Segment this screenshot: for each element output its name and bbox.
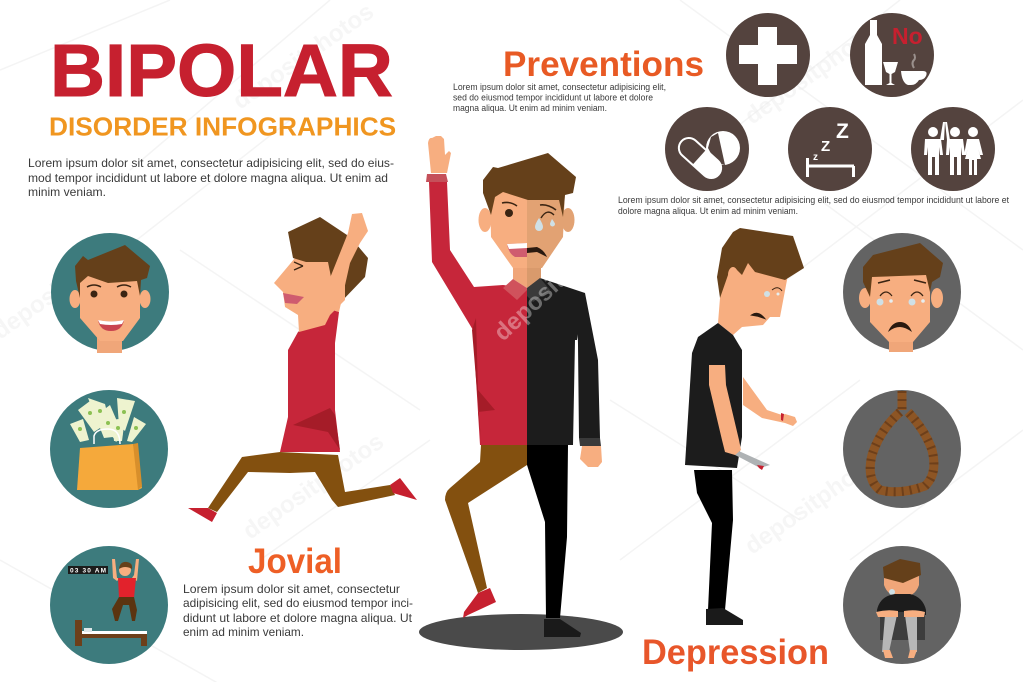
icon: sleep xyxy=(788,107,872,191)
jovial text block xyxy=(183,582,413,639)
left eye xyxy=(505,209,513,217)
panel: jovial icons xyxy=(50,233,169,664)
prevention note text block: Lorem ipsum dolor sit amet, consectetur adipisicing elit, sed do eiusmod tempor incididunt ut labore et xyxy=(618,195,1009,205)
icon: sleep: z xyxy=(813,152,818,163)
far arm xyxy=(743,377,797,426)
fist xyxy=(580,446,602,467)
intro text block: Lorem ipsum dolor sit amet, consectetur adipisicing elit, sed do eius- xyxy=(28,156,394,170)
panel: prevention icons xyxy=(665,13,995,191)
icon: medical cross xyxy=(726,13,810,97)
preventions text block: sed do eiusmod tempor incididunt ut labore et dolore xyxy=(453,92,653,102)
back hair xyxy=(340,240,368,303)
shoes xyxy=(188,478,417,522)
watermark: depositphotos xyxy=(740,443,891,560)
raised arm xyxy=(323,213,368,312)
panel: depression icons xyxy=(843,233,961,664)
cuff xyxy=(426,174,448,182)
tears xyxy=(535,218,555,231)
face right half xyxy=(527,190,565,268)
icon: noose xyxy=(843,390,961,508)
jovial text block: adipisicing elit, sed do eiusmod tempor inci- xyxy=(183,596,413,610)
jovial text block: Lorem ipsum dolor sit amet, consectetur xyxy=(183,582,400,596)
face xyxy=(274,258,345,332)
black cuff xyxy=(579,438,601,446)
raised hand xyxy=(428,136,451,173)
black leg xyxy=(527,445,568,618)
heading: preventions: Preventions xyxy=(503,45,704,84)
right eye xyxy=(541,212,554,218)
hair xyxy=(717,228,804,298)
title: BIPOLAR xyxy=(50,29,393,112)
icon: sleep: Z xyxy=(821,138,830,155)
knife xyxy=(735,450,770,468)
intro text block xyxy=(28,156,394,199)
black arm xyxy=(577,293,600,438)
red leg xyxy=(445,445,527,593)
icon: pills xyxy=(665,107,749,191)
watermark xyxy=(0,0,891,560)
red shoe xyxy=(463,588,496,618)
icon: sitting sad person xyxy=(843,546,961,664)
depression figure xyxy=(685,228,804,625)
watermark: depositphotos xyxy=(228,0,379,115)
hair xyxy=(483,153,576,217)
watermark over figures: depositphotos xyxy=(489,214,628,346)
black shoe xyxy=(544,619,581,637)
main split figure xyxy=(419,136,623,650)
sad half mouth xyxy=(527,247,547,257)
prevention note text block xyxy=(618,195,1009,216)
icon: shopping bag with money xyxy=(50,390,168,508)
heading: jovial: Jovial xyxy=(248,542,342,581)
watermark: depositphotos xyxy=(740,13,891,130)
jovial text block: didunt ut labore et dolore magna aliqua. Ut xyxy=(183,611,413,625)
preventions text block: Lorem ipsum dolor sit amet, consectetur adipisicing elit, xyxy=(453,82,666,92)
shirt xyxy=(280,308,340,452)
clock: 03 30 AM xyxy=(70,568,106,574)
mouth xyxy=(283,293,304,304)
trousers xyxy=(208,452,395,512)
subtitle: DISORDER INFOGRAPHICS xyxy=(49,112,396,141)
intro text block: minim veniam. xyxy=(28,185,106,199)
face left half xyxy=(490,190,527,268)
black torso xyxy=(527,278,585,445)
icon: 3:30 am jumping on bed xyxy=(50,546,168,664)
eye and tear xyxy=(772,288,782,291)
shoe xyxy=(706,608,743,625)
icon: crying face xyxy=(843,233,961,352)
legs xyxy=(694,470,733,610)
watermark: depositphotos xyxy=(238,428,389,545)
preventions text block xyxy=(453,82,666,113)
ears xyxy=(478,208,492,232)
happy half mouth xyxy=(507,243,527,257)
neck xyxy=(513,262,527,288)
mouth xyxy=(752,314,764,318)
icon: no alcohol or coffee: No xyxy=(892,23,923,49)
icon: sleep: Z xyxy=(836,120,849,143)
icon: family xyxy=(911,107,995,191)
neck and face xyxy=(718,250,787,335)
icon: happy face xyxy=(51,233,169,353)
icon: no alcohol or coffee xyxy=(850,13,934,97)
heading: depression: Depression xyxy=(642,633,829,672)
ground shadow xyxy=(419,614,623,650)
near arm xyxy=(709,365,741,455)
intro text block: mod tempor incididunt ut labore et dolore magna aliqua. Ut enim ad xyxy=(28,171,388,185)
jovial text block: enim ad minim veniam. xyxy=(183,625,304,639)
jovial jumping figure xyxy=(188,213,417,522)
red arm and torso xyxy=(429,182,527,445)
t-shirt xyxy=(685,323,742,468)
prevention note text block: dolore magna aliqua. Ut enim ad minim veniam. xyxy=(618,206,798,216)
preventions text block: magna aliqua. Ut enim ad minim veniam. xyxy=(453,103,607,113)
collars xyxy=(503,279,527,300)
hair xyxy=(288,217,347,277)
